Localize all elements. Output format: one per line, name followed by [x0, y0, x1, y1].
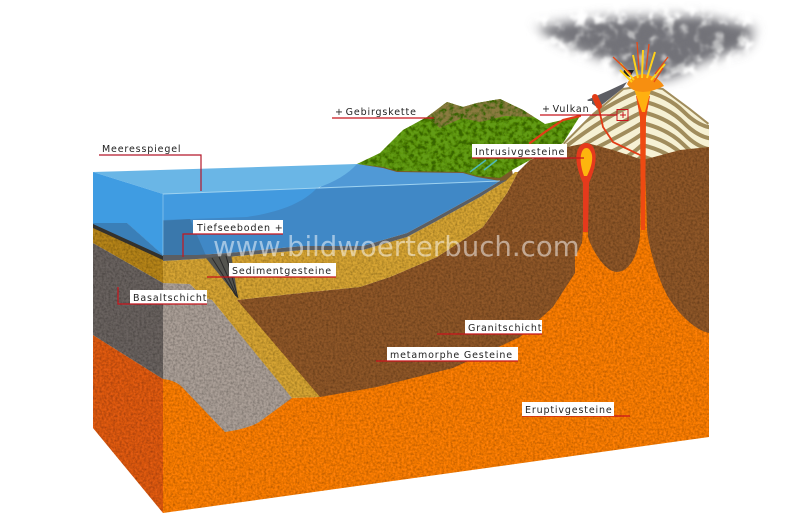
label: Eruptivgesteine: Eruptivgesteine: [525, 405, 613, 416]
label: Intrusivgesteine: Intrusivgesteine: [475, 147, 565, 158]
mountain range: [357, 99, 580, 183]
label: Meeresspiegel: Meeresspiegel: [102, 144, 181, 155]
label: Vulkan: [540, 101, 628, 120]
label: Tiefseeboden: [183, 220, 284, 257]
left face basalt: [93, 243, 163, 379]
label: Meeresspiegel: [99, 144, 201, 191]
seabed: [163, 180, 507, 261]
intrusion bulb and conduit: [576, 143, 596, 232]
label: metamorphe Gesteine: metamorphe Gesteine: [390, 350, 513, 361]
label: Basaltschicht: [118, 287, 207, 304]
label: Granitschicht: Granitschicht: [468, 323, 542, 334]
label: Granitschicht: [437, 320, 542, 334]
left face sediment: [93, 227, 163, 283]
sediment layer: [163, 172, 518, 398]
left seabed strip: [93, 224, 163, 260]
label: Sedimentgesteine: Sedimentgesteine: [232, 266, 332, 277]
watermark: www.bildwoerterbuch.com: [213, 230, 580, 263]
branch vent: [530, 97, 640, 155]
granite layer: [237, 143, 709, 400]
water left face: [93, 172, 163, 255]
water front base: [163, 181, 500, 255]
water body: [93, 164, 500, 258]
label: Tiefseeboden: Tiefseeboden +: [196, 223, 284, 234]
left face lava: [93, 335, 163, 513]
label: Basaltschicht: Basaltschicht: [133, 293, 207, 304]
label: Gebirgskette: + Gebirgskette: [335, 107, 417, 118]
striped volcano cone: [562, 87, 709, 160]
water surface light: [93, 164, 357, 194]
label: metamorphe Gesteine: [376, 347, 518, 361]
label: Eruptivgesteine: [522, 402, 630, 416]
water surface dark: [317, 164, 500, 189]
smoke plume: [535, 16, 755, 80]
label: Vulkan: + Vulkan: [542, 104, 589, 115]
deep band: [127, 219, 207, 258]
volcano back flank: [587, 82, 627, 108]
main conduit: [633, 86, 652, 230]
label: Intrusivgesteine: [472, 144, 584, 158]
eruption: [613, 42, 668, 92]
front basalt: [163, 283, 296, 446]
label: Sedimentgesteine: [207, 263, 336, 277]
light front water: [163, 188, 317, 220]
trench folds: [206, 254, 238, 298]
magma lava front: [163, 160, 709, 513]
